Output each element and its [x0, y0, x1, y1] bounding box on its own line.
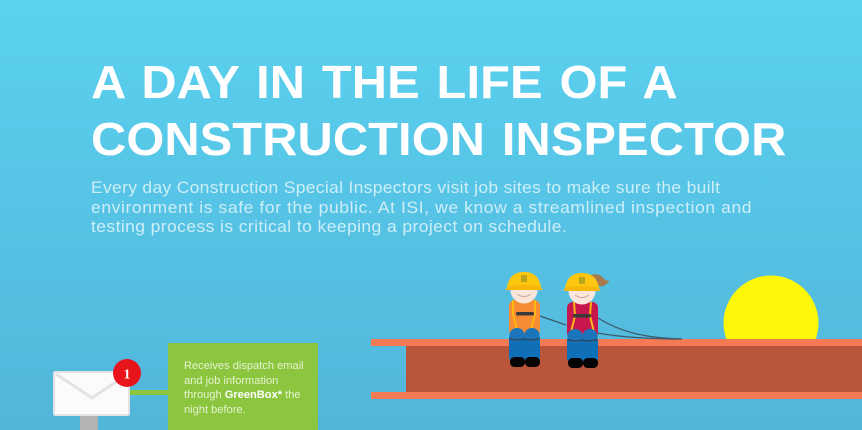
icon: mailbox post — [80, 415, 98, 430]
intro text: environment is safe for the public. At ISI, we know a streamlined inspection and — [91, 198, 752, 216]
steel beam — [371, 339, 862, 399]
badge number 1 — [113, 359, 141, 387]
step 1 text: night before. — [184, 404, 246, 416]
connector line — [129, 390, 169, 395]
icon: sun — [724, 276, 818, 370]
icon: envelope — [54, 372, 129, 415]
step 1 text: through GreenBox* the — [184, 389, 301, 401]
inspector one — [506, 272, 542, 367]
step 1 text — [184, 360, 304, 416]
intro text: testing process is critical to keeping a project on schedule. — [91, 217, 567, 236]
badge number 1: 1 — [124, 368, 130, 382]
inspector two — [564, 273, 609, 368]
step 1 text: Receives dispatch email — [184, 360, 304, 372]
title: A DAY IN THE LIFE OF A — [91, 56, 678, 108]
safety lines — [540, 316, 682, 339]
step 1 text: and job information — [184, 375, 278, 387]
intro text: Every day Construction Special Inspectors visit job sites to make sure the built — [91, 178, 720, 197]
title: CONSTRUCTION INSPECTOR — [91, 113, 786, 165]
title — [91, 56, 786, 165]
intro text — [91, 178, 752, 236]
panel: step 1 — [168, 343, 318, 430]
